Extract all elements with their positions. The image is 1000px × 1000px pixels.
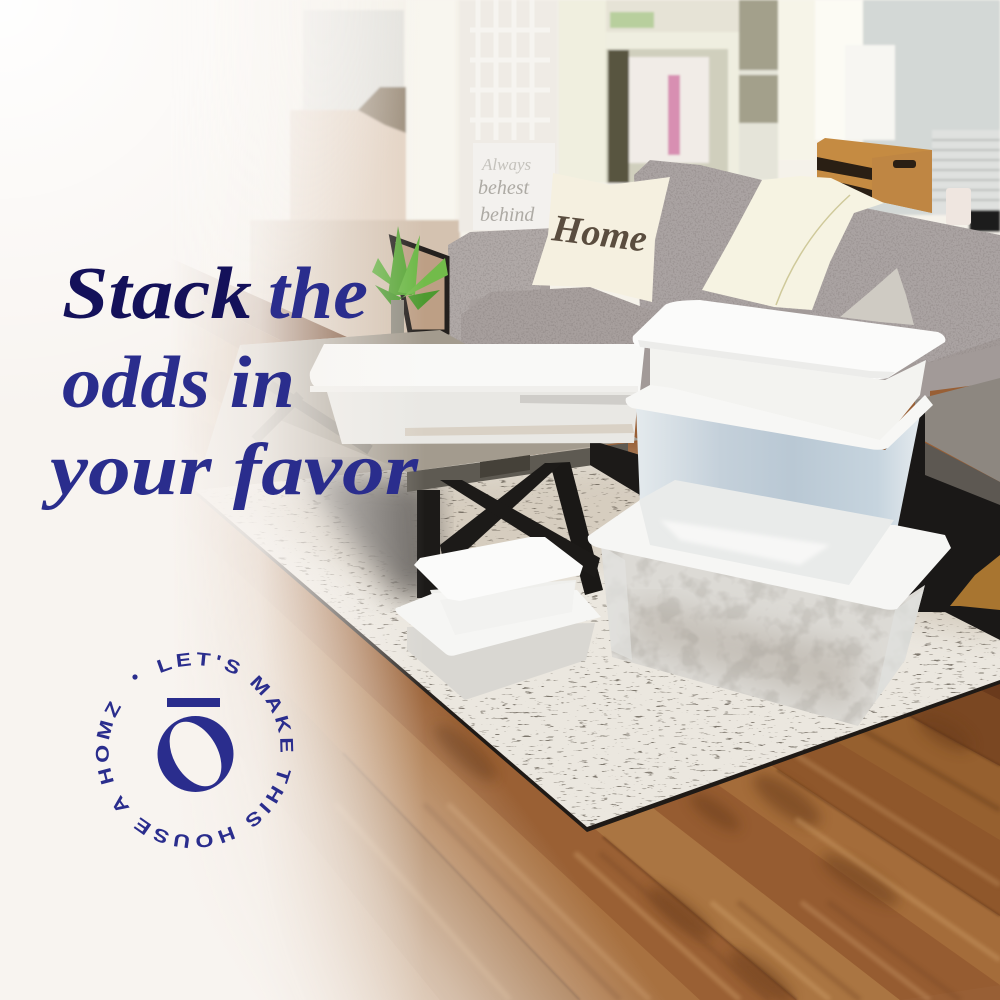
candle bbox=[946, 188, 971, 225]
storage bin: long flat bbox=[310, 344, 645, 444]
heading line 1: Stack bbox=[62, 253, 252, 335]
sofa bbox=[448, 160, 1000, 400]
under-table shadow bbox=[300, 470, 440, 600]
heading line 1 bbox=[62, 253, 368, 335]
centre sheer curtain with sign: behest bbox=[478, 177, 530, 199]
heading line 3: your favor bbox=[41, 429, 419, 511]
back wall and room bbox=[0, 0, 1000, 360]
side table at right bbox=[885, 378, 1000, 640]
circular slogan: LET'S MAKE THIS HOUSE A HOMZ bbox=[96, 652, 294, 848]
centre sheer curtain with sign: behind bbox=[480, 204, 535, 226]
storage bin: small stacked pair bbox=[395, 537, 601, 700]
throw blanket bbox=[702, 176, 884, 310]
wooden crate bbox=[817, 138, 932, 213]
centre sheer curtain with sign bbox=[459, 0, 558, 232]
striped cushion bbox=[840, 268, 914, 325]
area rug bbox=[195, 448, 1000, 832]
heading line 1: the bbox=[268, 253, 368, 335]
storage bin: middle stacked bbox=[626, 385, 933, 590]
logo mark: o with macron bbox=[158, 698, 234, 795]
pillow: Home bbox=[532, 173, 670, 302]
floor area beneath coffee table bbox=[195, 330, 640, 490]
storage bin: large bottom bbox=[588, 480, 951, 726]
slogan dot bbox=[132, 674, 138, 680]
storage bin: top bbox=[633, 300, 945, 445]
potted plant bbox=[372, 226, 448, 342]
pillow: Home: Home bbox=[549, 207, 649, 261]
centre sheer curtain with sign: Always bbox=[481, 155, 531, 174]
coffee table bbox=[240, 330, 640, 598]
heading line 2: odds in bbox=[62, 342, 295, 424]
